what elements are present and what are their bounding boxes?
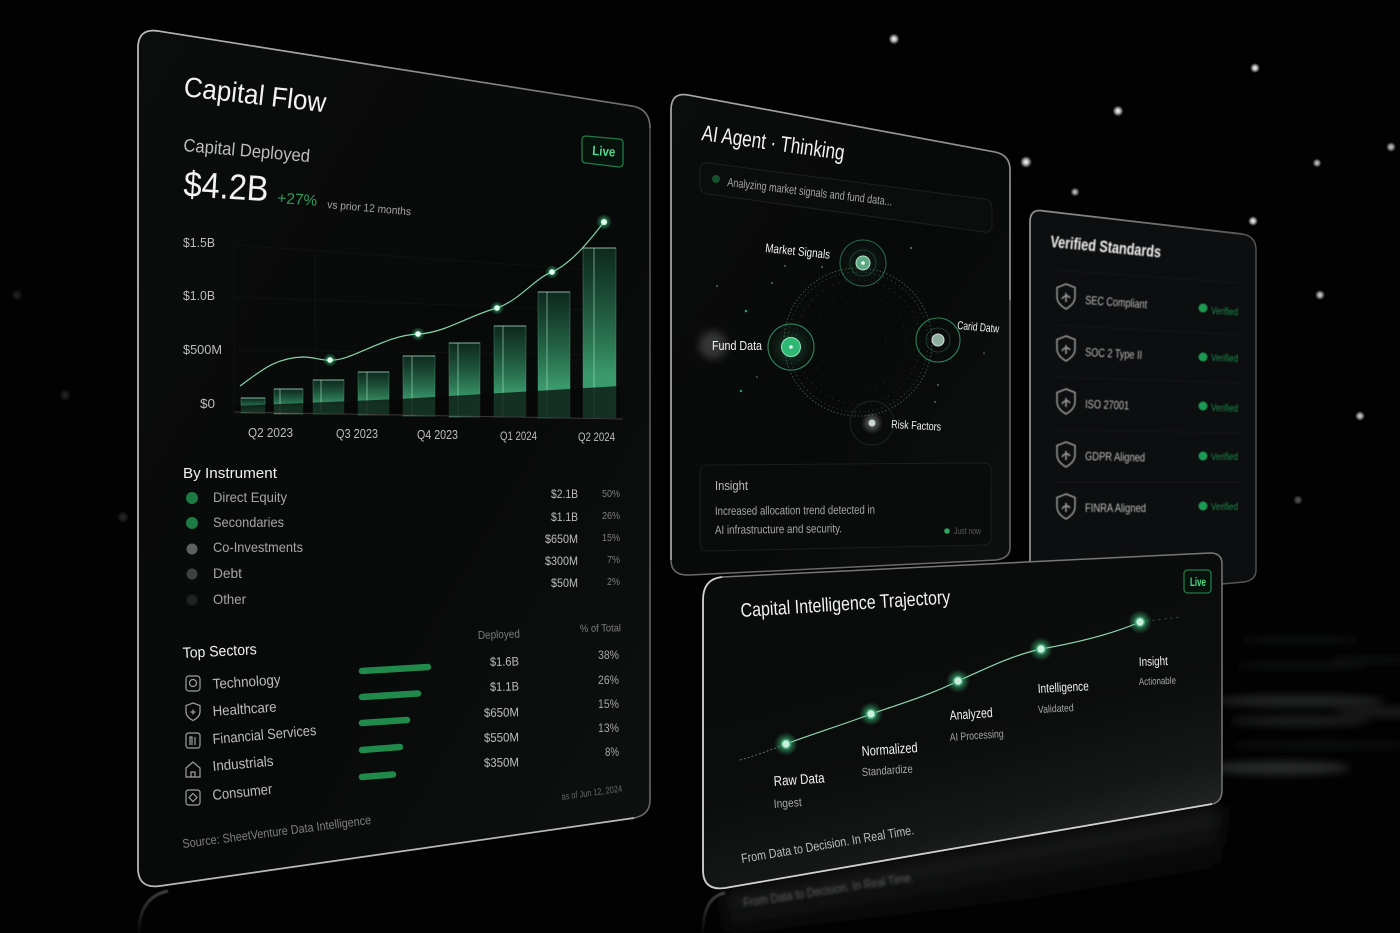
y axis labels bbox=[183, 235, 222, 411]
row: GDPR Aligned: Verified bbox=[1211, 451, 1238, 463]
area chart bbox=[183, 214, 623, 444]
sector values: 13% bbox=[598, 721, 619, 735]
y axis labels: $1.5B bbox=[183, 235, 215, 250]
reflection under Trajectory panel: From Data to Decision. In Real Time. bbox=[742, 870, 915, 910]
bar tops bbox=[241, 248, 616, 398]
row: SEC Compliant bbox=[1057, 284, 1239, 318]
KPI: +27% bbox=[277, 190, 318, 210]
live badge: Live bbox=[1190, 575, 1206, 589]
sector names: Technology bbox=[212, 672, 282, 693]
scatter points bbox=[716, 247, 985, 403]
instrument values: 15% bbox=[602, 532, 620, 544]
sector values bbox=[484, 648, 619, 770]
insight box: Increased allocation trend detected in bbox=[715, 503, 875, 518]
dark reflective band bbox=[234, 386, 620, 419]
heading: AI Agent · Thinking bbox=[700, 120, 846, 165]
section heading: Top Sectors bbox=[182, 641, 257, 662]
title: Capital Flow bbox=[182, 71, 329, 118]
top edge highlight bbox=[158, 31, 650, 128]
node: Fund Data: Fund Data bbox=[712, 339, 762, 353]
instrument names: Direct Equity bbox=[213, 489, 287, 505]
x axis labels: Q3 2023 bbox=[336, 427, 378, 441]
panel: Capital Flow bbox=[138, 31, 650, 886]
stage labels: Actionable bbox=[1139, 676, 1176, 688]
instrument values: 7% bbox=[607, 554, 620, 566]
instrument values: 2% bbox=[607, 576, 620, 588]
stage labels: Validated bbox=[1038, 702, 1074, 716]
insight box: Insight bbox=[715, 479, 748, 493]
row: ISO 27001: ISO 27001 bbox=[1085, 397, 1130, 413]
node: Fund Data bbox=[699, 323, 815, 371]
node: Carid Datw bbox=[916, 318, 1000, 362]
sector values: 38% bbox=[598, 648, 619, 662]
KPI: vs prior 12 months bbox=[327, 199, 412, 218]
heading: Verified Standards bbox=[1050, 232, 1162, 262]
status bar: Analyzing market signals and fund data... bbox=[727, 175, 893, 209]
panel: Verified Standards bbox=[1030, 210, 1256, 600]
KPI: $4.2B bbox=[183, 163, 270, 209]
node: Market Signals bbox=[765, 237, 889, 289]
x axis labels: Q1 2024 bbox=[500, 429, 537, 443]
as-of date: as of Jun 12, 2024 bbox=[561, 784, 623, 803]
sector values: $650M bbox=[484, 705, 519, 720]
sector values: $1.6B bbox=[490, 654, 519, 669]
sector bars bbox=[362, 667, 428, 777]
sector names: Healthcare bbox=[212, 700, 277, 720]
stage labels: Standardize bbox=[861, 763, 913, 779]
panel surface bbox=[671, 95, 1010, 575]
row: SEC Compliant: SEC Compliant bbox=[1085, 293, 1148, 311]
section: By Instrument bbox=[183, 465, 620, 607]
sector values: $350M bbox=[484, 755, 519, 770]
source note: Source: SheetVenture Data Intelligence bbox=[182, 813, 372, 851]
sector values: 8% bbox=[605, 745, 619, 759]
panel: Capital Intelligence Trajectory bbox=[703, 553, 1222, 888]
section: Top Sectors bbox=[182, 622, 621, 805]
panel surface bbox=[703, 553, 1222, 888]
edge highlight bbox=[671, 95, 1010, 560]
sector values: 26% bbox=[598, 673, 619, 687]
reflection under Trajectory panel bbox=[703, 806, 1222, 933]
trend points bbox=[323, 214, 612, 367]
stage labels: Insight bbox=[1139, 654, 1168, 669]
stage labels: AI Processing bbox=[949, 728, 1004, 744]
stage labels bbox=[773, 654, 1176, 811]
node: Carid Datw: Carid Datw bbox=[957, 320, 1000, 336]
row: SEC Compliant: Verified bbox=[1211, 305, 1239, 318]
live badge bbox=[1184, 570, 1211, 593]
left edge highlight bbox=[1030, 210, 1242, 570]
row dividers bbox=[1055, 270, 1240, 482]
y axis labels: $0 bbox=[200, 396, 215, 411]
instrument values: $50M bbox=[551, 576, 578, 590]
row: GDPR Aligned bbox=[1057, 442, 1238, 467]
row: SOC 2 Type II: SOC 2 Type II bbox=[1085, 345, 1142, 362]
panel surface bbox=[1030, 210, 1256, 600]
tagline: From Data to Decision. In Real Time. bbox=[740, 822, 915, 866]
row: FINRA Aligned: Verified bbox=[1211, 501, 1238, 513]
row: ISO 27001: Verified bbox=[1211, 402, 1238, 415]
insight box: AI infrastructure and security. bbox=[715, 521, 842, 537]
section heading: By Instrument bbox=[183, 465, 278, 482]
live badge: Live bbox=[592, 143, 616, 160]
instrument values: $300M bbox=[545, 554, 578, 568]
column headers: Deployed bbox=[478, 629, 520, 642]
x axis labels: Q4 2023 bbox=[417, 428, 458, 442]
standards list bbox=[1055, 270, 1240, 519]
stage labels: Raw Data bbox=[773, 769, 825, 789]
KPI bbox=[183, 135, 412, 218]
sector values: $550M bbox=[484, 730, 519, 745]
legend dots bbox=[186, 492, 198, 606]
node: Market Signals: Market Signals bbox=[765, 241, 831, 262]
trend line bbox=[240, 222, 604, 386]
floor streaks bbox=[1210, 636, 1400, 775]
row: FINRA Aligned bbox=[1057, 494, 1238, 519]
panel surface bbox=[138, 31, 650, 886]
instrument values: 26% bbox=[602, 510, 620, 522]
background stars bbox=[11, 34, 1396, 523]
stage labels: Intelligence bbox=[1037, 678, 1089, 696]
baseline bbox=[234, 412, 623, 419]
instrument names bbox=[213, 489, 303, 607]
row: FINRA Aligned: FINRA Aligned bbox=[1085, 501, 1146, 515]
edge highlight bbox=[703, 577, 1212, 888]
status bar bbox=[700, 163, 992, 232]
column headers bbox=[478, 622, 621, 642]
KPI: Capital Deployed bbox=[183, 135, 311, 166]
row: SOC 2 Type II: Verified bbox=[1211, 352, 1238, 365]
heading: Capital Intelligence Trajectory bbox=[740, 586, 951, 622]
network diagram bbox=[699, 237, 1000, 445]
node: Risk Factors: Risk Factors bbox=[891, 419, 942, 434]
sector values: $1.1B bbox=[490, 679, 519, 694]
sector names: Industrials bbox=[212, 754, 274, 775]
bars bbox=[234, 248, 620, 419]
grid lines bbox=[234, 242, 620, 414]
panel: AI Agent Thinking bbox=[671, 95, 1010, 575]
row: ISO 27001 bbox=[1057, 389, 1238, 415]
stage labels: Normalized bbox=[861, 739, 918, 759]
y axis labels: $500M bbox=[183, 342, 222, 357]
reflection under Capital Flow panel bbox=[139, 891, 168, 933]
row: SOC 2 Type II bbox=[1057, 336, 1238, 365]
sector names bbox=[212, 672, 317, 804]
x axis labels bbox=[248, 426, 615, 444]
instrument values: $1.1B bbox=[551, 510, 578, 524]
sector names: Financial Services bbox=[212, 723, 317, 748]
instrument names: Secondaries bbox=[213, 514, 284, 530]
column headers: % of Total bbox=[580, 622, 621, 635]
live badge bbox=[582, 136, 623, 167]
x axis labels: Q2 2024 bbox=[578, 430, 615, 444]
edge highlight bbox=[138, 31, 634, 886]
x axis labels: Q2 2023 bbox=[248, 426, 293, 440]
stage labels: Analyzed bbox=[949, 705, 993, 723]
instrument names: Other bbox=[213, 591, 246, 607]
row: GDPR Aligned: GDPR Aligned bbox=[1085, 449, 1145, 465]
sector names: Consumer bbox=[212, 782, 273, 804]
y axis labels: $1.0B bbox=[183, 288, 215, 303]
instrument names: Co-Investments bbox=[213, 539, 303, 555]
stage labels: Ingest bbox=[773, 795, 803, 811]
instrument values: 50% bbox=[602, 488, 620, 500]
instrument values bbox=[545, 487, 620, 590]
node: Risk Factors bbox=[850, 401, 942, 445]
insight box: Just now bbox=[954, 526, 981, 536]
sector values: 15% bbox=[598, 697, 619, 711]
trajectory line bbox=[740, 617, 1182, 760]
trajectory nodes bbox=[774, 610, 1152, 756]
instrument names: Debt bbox=[213, 565, 242, 581]
insight box bbox=[700, 463, 991, 551]
instrument values: $650M bbox=[545, 532, 578, 546]
dotted sphere bbox=[784, 268, 932, 416]
instrument values: $2.1B bbox=[551, 487, 578, 501]
sector icons bbox=[186, 676, 200, 805]
bar highlight edges bbox=[280, 248, 594, 418]
